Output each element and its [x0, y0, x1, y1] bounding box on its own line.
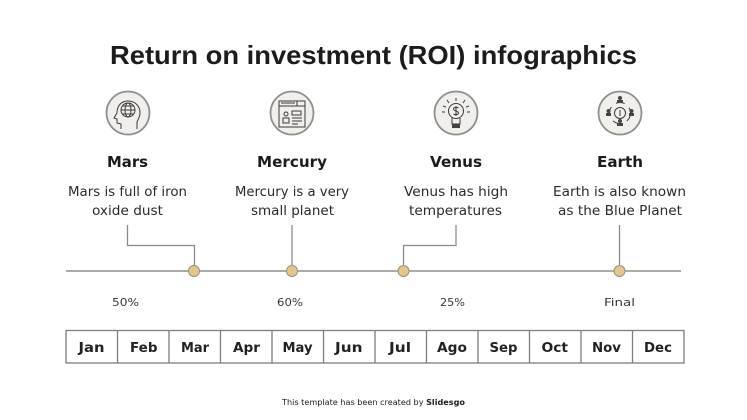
text block: Earth [553, 185, 686, 219]
month table: Ago [437, 341, 467, 356]
text block: Mars: oxide dust [92, 204, 163, 219]
month table: Jul [388, 341, 411, 356]
month table: Jun [334, 341, 362, 356]
text block: Mars [68, 185, 187, 219]
connector: Earth [618, 225, 620, 265]
icon: light bulb with dollar [434, 92, 478, 134]
heading: Venus: Venus [430, 153, 482, 171]
month table [66, 330, 684, 363]
month table: May [282, 341, 313, 356]
timeline marker: Mercury [286, 266, 298, 276]
connector: Mars [128, 225, 194, 266]
label: Final: Final [604, 296, 635, 309]
month table: Jan [77, 341, 104, 356]
title: Return on investment (ROI) infographics [110, 40, 637, 70]
heading: Mars: Mars [107, 153, 148, 171]
icon: people around dollar [598, 92, 642, 134]
timeline marker: Venus [398, 266, 409, 276]
text block: Mercury [235, 185, 349, 219]
text block: Venus: temperatures [409, 204, 502, 219]
text block: Mercury: small planet [251, 204, 334, 219]
label: 25%: 25% [440, 296, 465, 309]
text block: Venus [404, 185, 508, 219]
icon: head with globe [106, 92, 150, 134]
timeline marker: Earth [614, 266, 625, 276]
month table: Sep [490, 341, 518, 356]
label: 50%: 50% [112, 296, 139, 309]
month table: Nov [592, 341, 622, 356]
timeline marker: Mars [188, 266, 200, 276]
month table: Mar [181, 341, 210, 356]
footer credit: This template has been created by Slidesgo [281, 398, 465, 407]
text block: Mercury: Mercury is a very [235, 185, 349, 200]
timeline axis [66, 270, 681, 272]
text block: Earth: Earth is also known [553, 185, 686, 200]
month table: Oct [542, 341, 568, 356]
connector: Mercury [291, 225, 293, 265]
month table: Dec [644, 341, 672, 356]
heading: Earth: Earth [597, 153, 643, 171]
heading: Mercury: Mercury [257, 153, 327, 171]
text block: Earth: as the Blue Planet [558, 204, 682, 219]
month table: Feb [130, 341, 158, 356]
label: 60%: 60% [277, 296, 303, 309]
text block: Mars: Mars is full of iron [68, 185, 187, 200]
icon: browser window with profile [270, 92, 314, 134]
connector: Venus [404, 225, 456, 266]
text block: Venus: Venus has high [404, 185, 508, 200]
month table: Apr [233, 341, 261, 356]
